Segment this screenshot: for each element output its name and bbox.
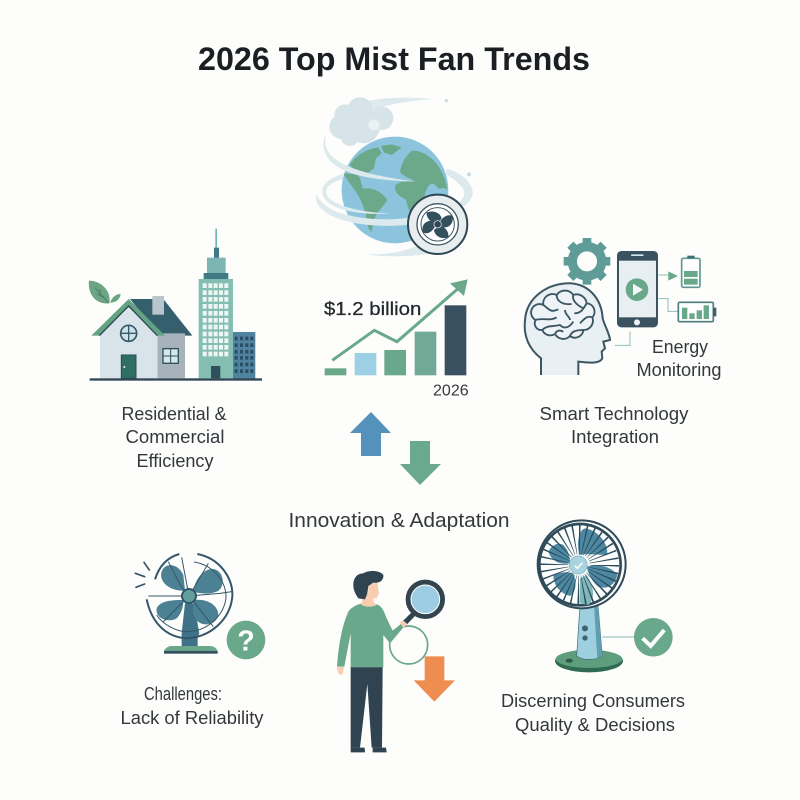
- label: challenges: Lack of Reliability: [120, 708, 264, 728]
- icon: brain: [531, 291, 595, 339]
- icon: unreliable fan with question mark: [135, 554, 265, 659]
- label: discerning consumers: Discerning Consumers: [501, 691, 685, 711]
- arrow: down: [400, 441, 441, 485]
- label: smart technology integration: Smart Technology: [540, 404, 688, 424]
- icon: battery horizontal: [678, 302, 716, 322]
- icon: smart technology head, phone and batteries: [525, 238, 716, 375]
- arrow: up: [350, 412, 391, 456]
- arrow: growth trend: [332, 279, 468, 360]
- label: challenges: [120, 684, 264, 728]
- icon: battery vertical: [682, 256, 700, 287]
- year label: 2026: [433, 383, 469, 400]
- label: challenges: Challenges:: [144, 684, 222, 704]
- label: discerning consumers: Quality & Decisions: [515, 715, 675, 735]
- icon: person with magnifying glass: [337, 571, 455, 752]
- bar chart: market growth: [324, 279, 469, 400]
- label: residential and commercial efficiency: Efficiency: [136, 451, 214, 471]
- icon: gear: [564, 238, 610, 285]
- icon: quality desk fan with check: [538, 520, 673, 672]
- title: 2026 Top Mist Fan Trends: [198, 41, 590, 77]
- label: residential and commercial efficiency: Residential &: [122, 404, 226, 424]
- market size value: $1.2 billion: [324, 298, 421, 319]
- label: residential and commercial efficiency: [122, 404, 226, 471]
- icon: question mark badge: ?: [237, 625, 255, 657]
- icon: leaves: [89, 281, 121, 304]
- label: smart technology integration: [540, 404, 688, 447]
- label: energy monitoring: Monitoring: [636, 360, 722, 380]
- label: energy monitoring: [636, 337, 722, 380]
- label: innovation and adaptation: Innovation & Adaptation: [288, 510, 510, 532]
- label: discerning consumers: [501, 691, 685, 735]
- label: smart technology integration: Integration: [571, 427, 659, 447]
- icon: house and office buildings: [89, 229, 262, 381]
- icon: check badge: [634, 618, 673, 657]
- icon: orange down arrow: [414, 656, 455, 702]
- label: residential and commercial efficiency: Commercial: [126, 427, 224, 447]
- icon: globe with swirling mist and fan: [316, 97, 473, 256]
- label: energy monitoring: Energy: [652, 337, 708, 357]
